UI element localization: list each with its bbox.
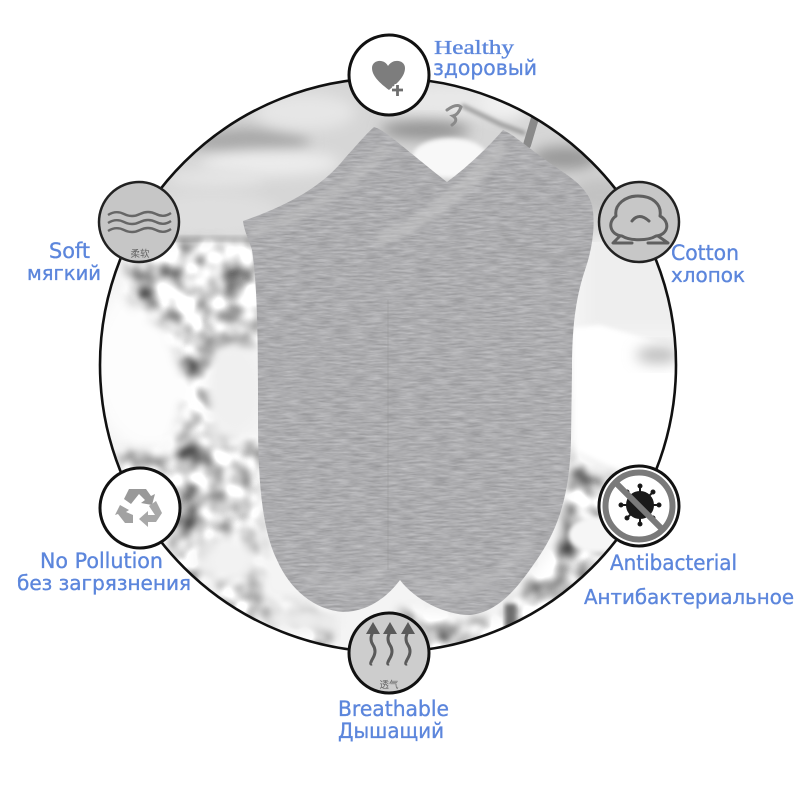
label: soft: Soft	[49, 239, 90, 263]
label: breathable	[338, 697, 449, 743]
badge: no pollution	[100, 468, 180, 548]
label: cotton: хлопок	[671, 263, 745, 287]
label: cotton	[671, 241, 745, 287]
small caption: 柔软	[130, 246, 150, 260]
label: antibacterial: Antibacterial	[610, 551, 737, 575]
label: healthy: Healthy	[434, 37, 514, 59]
lower right field	[394, 448, 616, 647]
icon: recycle	[115, 489, 162, 527]
big circle outline	[100, 78, 676, 652]
sky and clouds	[163, 82, 614, 244]
label: breathable: Breathable	[338, 697, 449, 721]
toe highlights	[310, 540, 530, 592]
label: soft	[27, 239, 101, 285]
socks	[243, 127, 594, 615]
cuff highlights	[250, 146, 386, 232]
label: no pollution	[17, 549, 191, 595]
branch at top	[447, 106, 535, 145]
icon: virus	[620, 484, 660, 526]
white patches over field	[196, 346, 340, 633]
label: healthy: здоровый	[433, 56, 537, 80]
white cotton boll right	[574, 326, 674, 468]
icon: cotton boll	[611, 196, 668, 243]
badge: antibacterial	[599, 466, 679, 546]
background photo: cotton field in grey	[90, 70, 690, 660]
label: cotton: Cotton	[671, 241, 739, 265]
label: breathable: Дышащий	[338, 719, 444, 743]
label: antibacterial: Антибактериальное	[584, 585, 794, 609]
badge: healthy	[349, 35, 429, 115]
label: no pollution: No Pollution	[40, 549, 163, 573]
white cotton boll left	[102, 304, 180, 439]
seam between socks	[387, 300, 389, 570]
label: healthy	[433, 37, 537, 80]
heel shading	[500, 225, 582, 256]
label: antibacterial	[584, 551, 794, 609]
badge: soft	[99, 182, 179, 262]
label: soft: мягкий	[27, 261, 101, 285]
icon: rising arrows	[366, 622, 415, 664]
small caption: 透气	[379, 677, 399, 691]
icon: waves	[108, 212, 171, 232]
mottled cotton field left	[115, 240, 330, 652]
badge: cotton	[599, 182, 679, 262]
right sock	[370, 130, 594, 615]
icon: prohibition sign	[606, 472, 672, 540]
left sock	[243, 127, 470, 612]
label: no pollution: без загрязнения	[17, 571, 191, 595]
icon: heart plus	[372, 61, 405, 96]
badge: breathable	[349, 613, 429, 693]
